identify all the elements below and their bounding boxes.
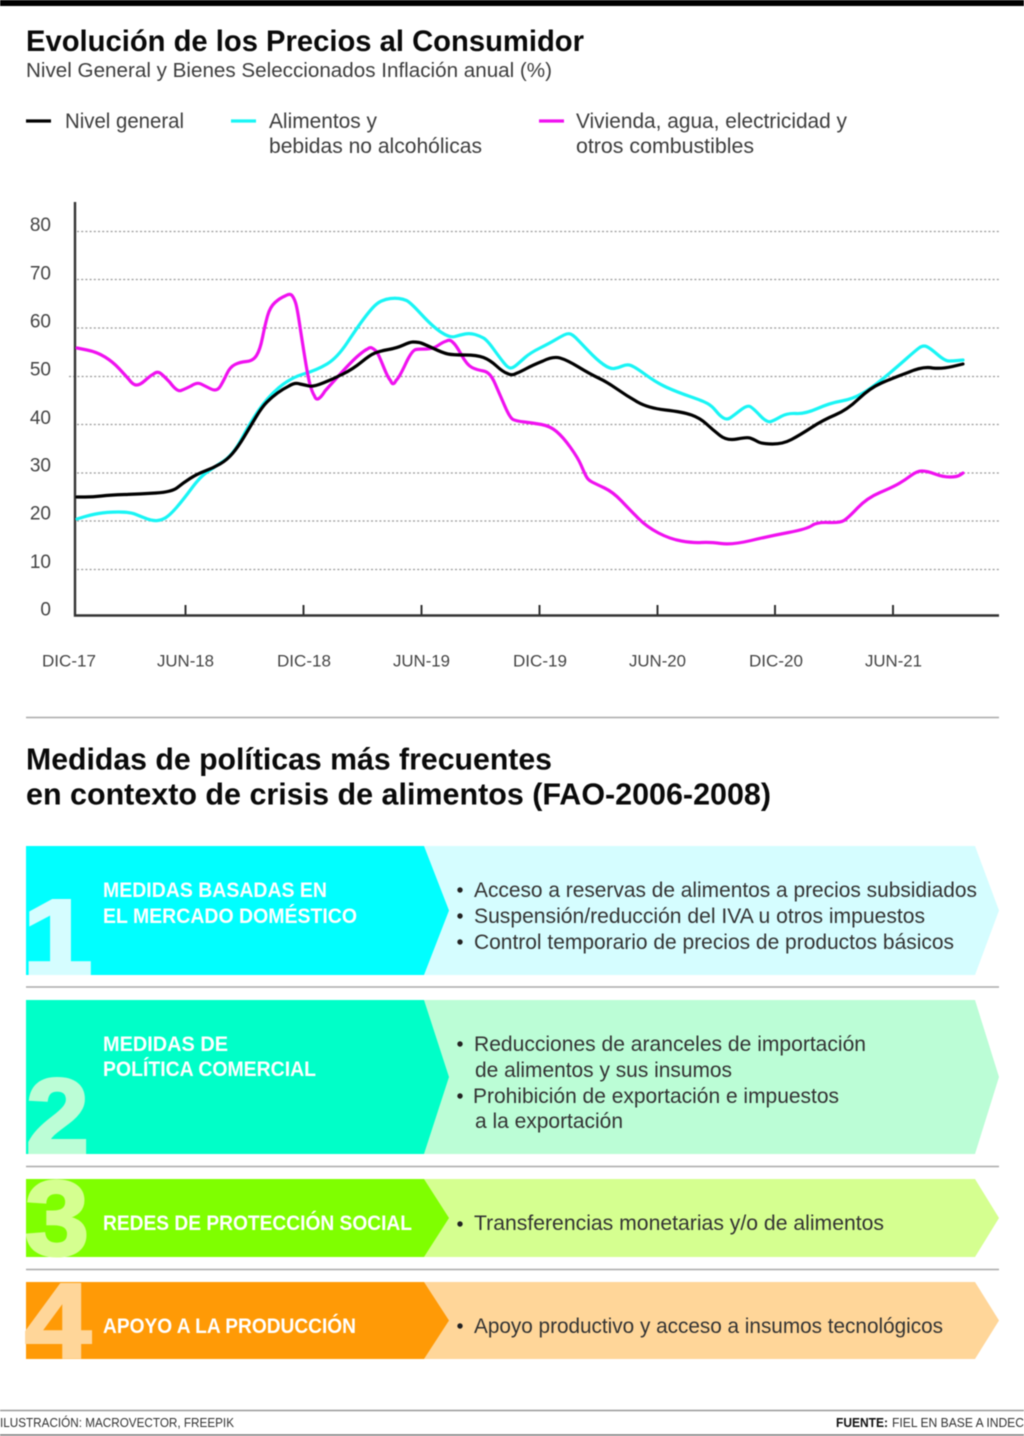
list 1: Suspensión/reducción del IVA u otros impuestos: [474, 904, 925, 928]
list 1: Acceso a reservas de alimentos a precios subsidiados: [474, 878, 977, 902]
credit: ILUSTRACIÓN: MACROVECTOR, FREEPIK: [0, 1415, 234, 1430]
legend: alimentos y bebidas: bebidas no alcohólicas: [269, 135, 482, 158]
y axis labels: [30, 215, 51, 620]
series: vivienda, agua, electricidad (magenta): [77, 294, 963, 544]
x axis labels: JUN-19: [393, 652, 450, 670]
y axis labels: 60: [30, 312, 51, 332]
x axis labels: JUN-20: [629, 652, 686, 670]
heading 2: MEDIDAS DE: [103, 1033, 228, 1056]
y axis labels: 10: [30, 552, 51, 573]
list 3: Transferencias monetarias y/o de alimentos: [474, 1211, 884, 1235]
x axis labels: DIC-17: [42, 652, 96, 670]
heading 2: POLÍTICA COMERCIAL: [103, 1058, 316, 1081]
panel: medidas basadas en el mercado doméstico: [22, 846, 999, 996]
heading 1: MEDIDAS BASADAS EN: [103, 879, 327, 902]
y axis labels: 70: [30, 264, 51, 284]
list 2: Prohibición de exportación e impuestos: [473, 1084, 839, 1108]
section heading: [26, 742, 771, 812]
legend: [26, 110, 847, 158]
y axis labels: 40: [30, 408, 51, 429]
legend: vivienda: Vivienda, agua, electricidad y: [576, 110, 847, 133]
heading 2: [103, 1033, 316, 1081]
heading 1: [103, 879, 357, 928]
number 1: 1: [22, 878, 92, 996]
legend: vivienda: [539, 110, 847, 158]
y axis labels: 30: [30, 456, 51, 476]
heading 3: REDES DE PROTECCIÓN SOCIAL: [103, 1211, 412, 1235]
series: nivel general (black): [77, 342, 963, 497]
y axis labels: 80: [30, 215, 51, 236]
x axis labels: JUN-18: [157, 652, 214, 670]
section heading: Medidas de políticas más frecuentes: [26, 742, 552, 776]
list 2: [457, 1032, 866, 1133]
subtitle: Nivel General y Bienes Seleccionados Inflación anual (%): [26, 60, 552, 82]
x axis labels: DIC-19: [513, 652, 567, 670]
list 1: Control temporario de precios de productos básicos: [474, 930, 954, 954]
legend: alimentos y bebidas: Alimentos y: [269, 110, 377, 133]
source: FUENTE:: [836, 1415, 888, 1430]
x axis labels: JUN-21: [865, 652, 922, 670]
list 1: [457, 878, 977, 954]
title: Evolución de los Precios al Consumidor: [26, 25, 584, 58]
x axis labels: DIC-20: [749, 652, 803, 670]
x axis labels: DIC-18: [277, 652, 331, 670]
panel: redes de protección social: [25, 1160, 999, 1278]
heading 4: APOYO A LA PRODUCCIÓN: [103, 1314, 356, 1338]
x axis labels: [42, 652, 922, 670]
series: alimentos y bebidas (cyan): [77, 298, 963, 521]
list 4: Apoyo productivo y acceso a insumos tecnológicos: [474, 1314, 943, 1338]
number 3: 3: [25, 1160, 89, 1278]
y axis labels: 20: [30, 504, 51, 524]
list 2: de alimentos y sus insumos: [475, 1058, 732, 1082]
list 2: Reducciones de aranceles de importación: [474, 1032, 866, 1056]
list 2: a la exportación: [475, 1109, 623, 1133]
section heading: en contexto de crisis de alimentos (FAO-2006-2008): [26, 776, 771, 812]
y axis labels: 0: [40, 600, 51, 620]
legend: nivel general: Nivel general: [65, 110, 184, 133]
axes and ticks: [75, 202, 999, 616]
number 4: 4: [25, 1262, 91, 1380]
line chart: [30, 202, 999, 670]
heading 1: EL MERCADO DOMÉSTICO: [103, 905, 357, 928]
panel: apoyo a la producción: [25, 1262, 999, 1380]
legend: alimentos y bebidas: [231, 110, 482, 158]
legend: vivienda: otros combustibles: [576, 135, 754, 158]
panel: medidas de política comercial: [26, 1000, 999, 1176]
y axis labels: 50: [30, 360, 51, 380]
number 2: 2: [26, 1058, 89, 1176]
